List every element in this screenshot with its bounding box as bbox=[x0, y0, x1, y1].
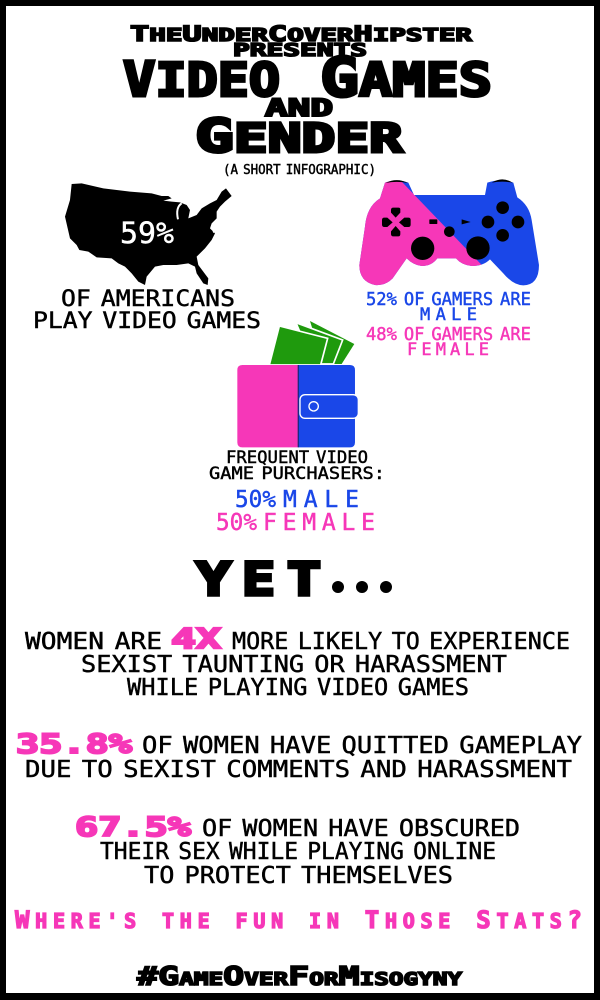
stat: 4x: 4X bbox=[171, 622, 221, 655]
stat: 59 percent: 59% bbox=[120, 216, 174, 250]
label: of americans: OF AMERICANS bbox=[61, 287, 235, 312]
heading: yet: T bbox=[287, 553, 321, 606]
icon: game controller bbox=[359, 179, 539, 285]
stat: male purchasers: MALE bbox=[283, 487, 359, 513]
stat block: 4x harassment: SEXIST TAUNTING OR HARASSMENT bbox=[81, 652, 507, 678]
stat block: 4x harassment: MORE LIKELY TO EXPERIENCE bbox=[232, 629, 570, 655]
presenter line: T HE U NDER C OVER H IPSTER bbox=[130, 22, 472, 46]
icon: US map bbox=[65, 183, 232, 285]
stat block: quitting gameplay: OF WOMEN HAVE QUITTED GAMEPLAY bbox=[142, 733, 582, 759]
main title line one: GAMES bbox=[320, 46, 492, 109]
heading: yet bbox=[196, 553, 392, 606]
panel: purchasers bbox=[209, 321, 385, 536]
callout: closing question: W HERE'S THE FUN IN T HOSE S TATS? bbox=[15, 906, 582, 934]
icon: wallet with cash bbox=[237, 321, 358, 447]
stat block: 4x harassment: WOMEN ARE bbox=[25, 629, 162, 655]
stat: female purchasers: FEMALE bbox=[263, 510, 375, 536]
stat: 35.8 percent: 35.8% bbox=[16, 729, 133, 760]
subtitle: (A SHORT INFOGRAPHIC) bbox=[223, 163, 376, 178]
stat: 67.5 percent: 67.5% bbox=[75, 812, 192, 843]
stat block: 4x harassment: WHILE PLAYING VIDEO GAMES bbox=[127, 675, 469, 701]
stat: female purchasers: 50% bbox=[216, 510, 257, 536]
stat block: quitting gameplay bbox=[16, 729, 582, 783]
stat: male gamers: 52% OF GAMERS ARE bbox=[366, 289, 531, 310]
label: frequent video: FREQUENT VIDEO bbox=[226, 448, 368, 468]
stat block: quitting gameplay: DUE TO SEXIST COMMENTS AND HARASSMENT bbox=[25, 757, 572, 783]
panel: americans who play bbox=[33, 183, 261, 334]
hashtag: #G AME O VER F OR M ISOGYNY bbox=[137, 962, 462, 992]
heading: yet: Y bbox=[196, 553, 231, 606]
stat block: obscuring sex: TO PROTECT THEMSELVES bbox=[144, 863, 453, 889]
stat: male purchasers bbox=[235, 487, 359, 513]
presents line: PRESENTS bbox=[233, 40, 367, 61]
panel: gamers by gender bbox=[359, 179, 539, 360]
stat block: obscuring sex: THEIR SEX WHILE PLAYING ONLINE bbox=[100, 839, 496, 865]
label: female: FEMALE bbox=[407, 340, 489, 360]
label: male: MALE bbox=[420, 305, 477, 325]
main title line one bbox=[123, 46, 492, 109]
stat block: obscuring sex bbox=[75, 812, 520, 889]
heading: yet: E bbox=[242, 553, 275, 606]
label: game purchasers: GAME PURCHASERS: bbox=[209, 464, 385, 484]
stat block: obscuring sex: OF WOMEN HAVE OBSCURED bbox=[202, 816, 520, 842]
main title line two: AND bbox=[265, 94, 333, 122]
stat: male purchasers: 50% bbox=[235, 487, 276, 513]
main title line three: G ENDER bbox=[195, 109, 404, 163]
stat: female gamers: 48% OF GAMERS ARE bbox=[366, 324, 531, 345]
title block bbox=[123, 22, 492, 178]
stat block: 4x harassment bbox=[25, 622, 570, 701]
main title line one: VIDEO bbox=[123, 52, 280, 108]
label: play video games: PLAY VIDEO GAMES bbox=[33, 309, 261, 334]
